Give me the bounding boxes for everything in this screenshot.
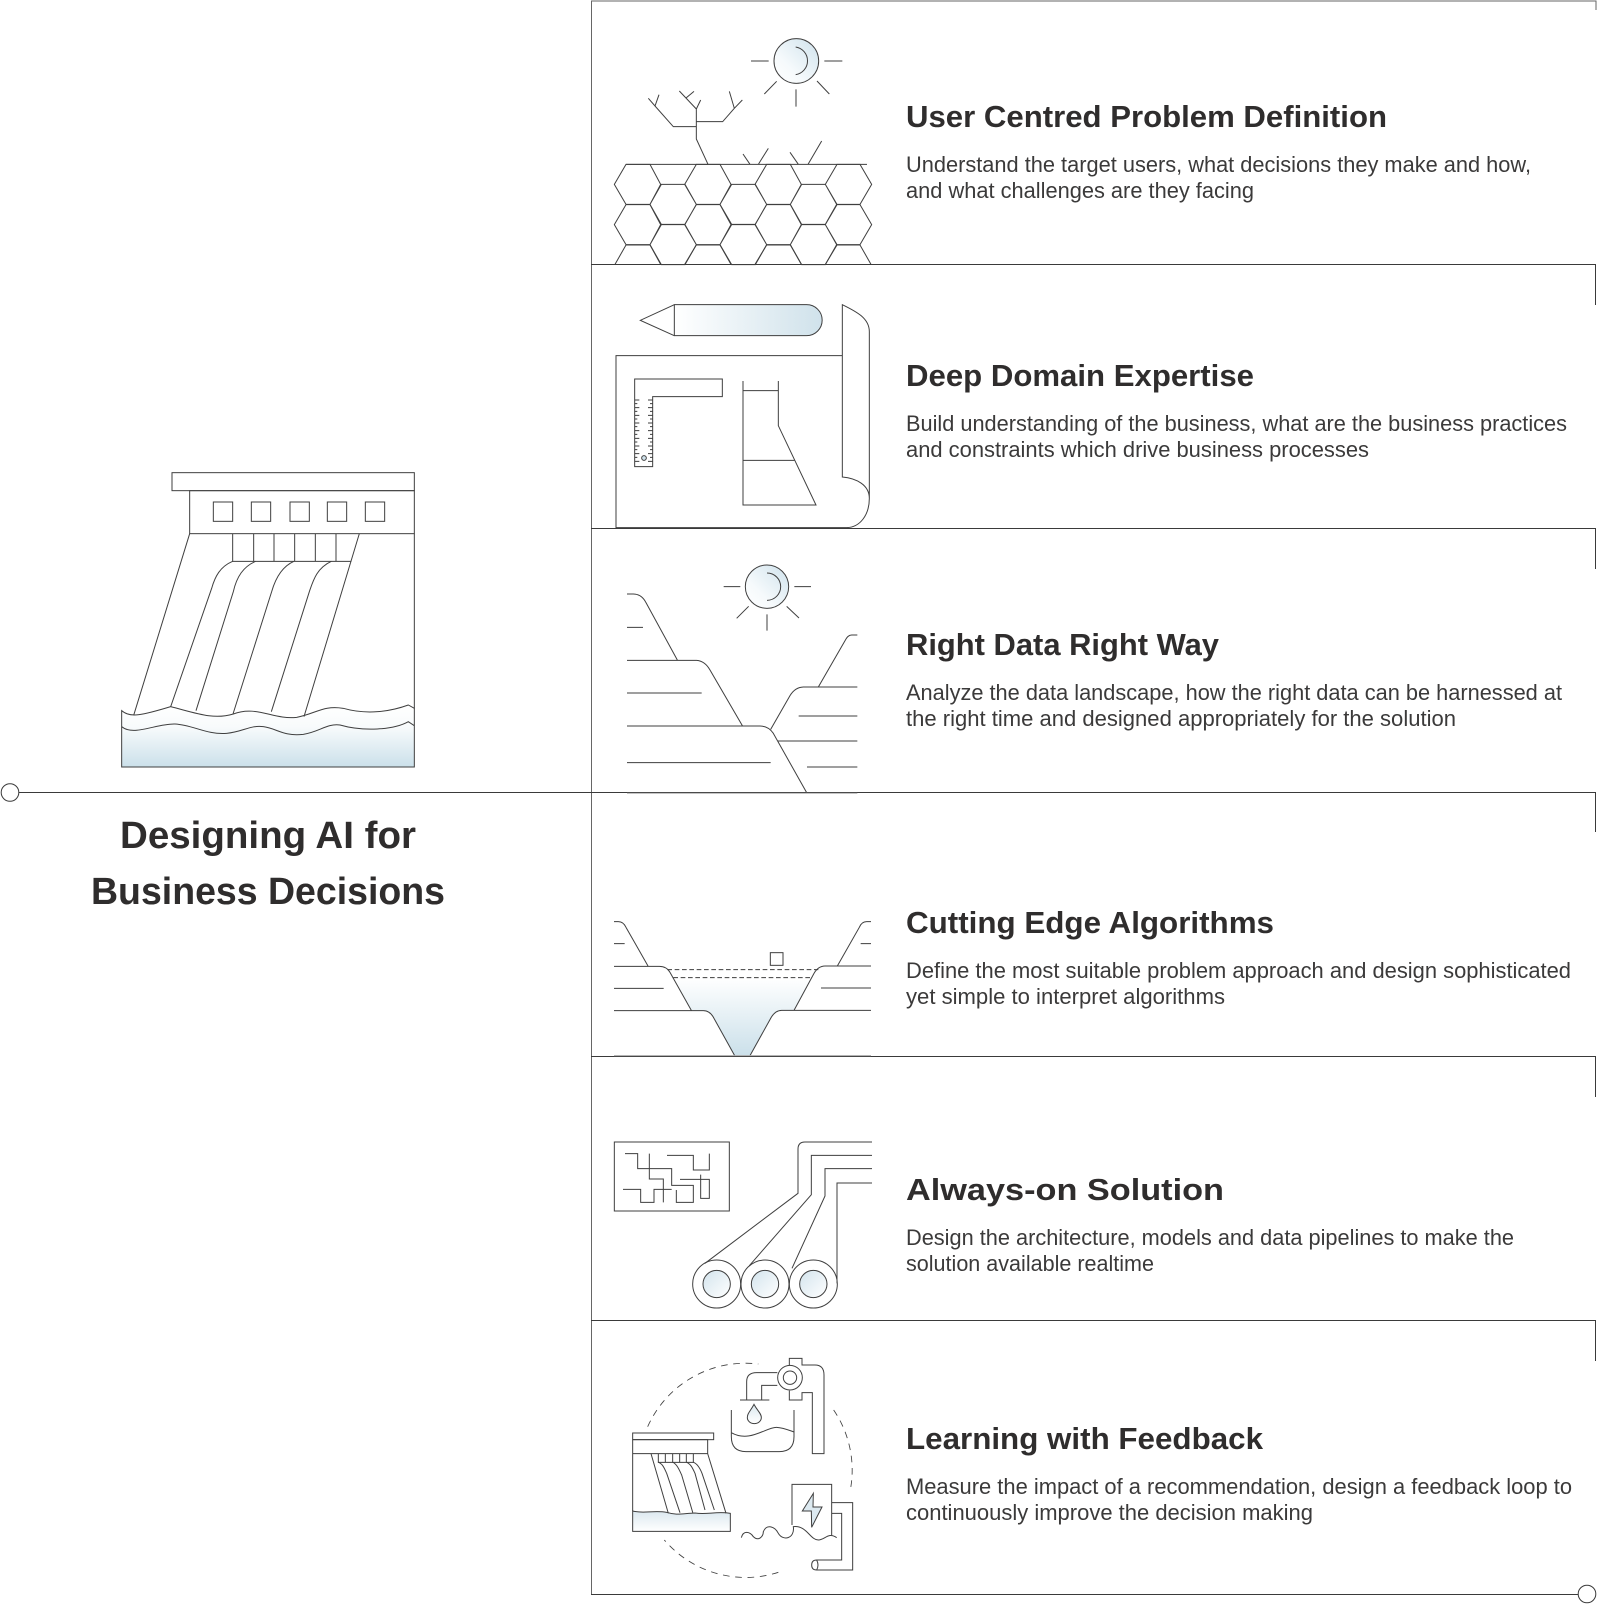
- icon: sun over terraced valley: [627, 565, 857, 793]
- text block: [906, 958, 1571, 1009]
- title: Business Decisions: [91, 871, 445, 913]
- heading: Always-on Solution: [906, 1172, 1224, 1207]
- text block: Design the architecture, models and data pipelines to make the: [906, 1225, 1514, 1250]
- heading: Cutting Edge Algorithms: [906, 905, 1274, 940]
- icon: dam, pump and power feedback cycle: [633, 1358, 853, 1577]
- icon: hydro dam: [122, 473, 414, 767]
- text block: [906, 1474, 1572, 1525]
- heading: Learning with Feedback: [906, 1421, 1264, 1456]
- text block: Build understanding of the business, what are the business practices: [906, 411, 1567, 436]
- panel: always-on solution: [614, 1142, 1514, 1308]
- heading: Deep Domain Expertise: [906, 358, 1254, 393]
- icon: filled reservoir cross section: [614, 922, 871, 1056]
- text block: yet simple to interpret algorithms: [906, 984, 1225, 1009]
- text block: [906, 152, 1531, 203]
- text block: solution available realtime: [906, 1251, 1154, 1276]
- title: [91, 815, 445, 913]
- text block: [906, 1225, 1514, 1276]
- title: Designing AI for: [120, 815, 416, 857]
- text block: continuously improve the decision making: [906, 1500, 1313, 1525]
- heading: Right Data Right Way: [906, 627, 1220, 662]
- panel: cutting edge algorithms: [614, 905, 1571, 1056]
- heading: User Centred Problem Definition: [906, 99, 1387, 134]
- text block: and what challenges are they facing: [906, 178, 1254, 203]
- text block: the right time and designed appropriately for the solution: [906, 706, 1456, 731]
- icon: sun, dry tree and cracked ground: [614, 39, 872, 265]
- panel: user centred problem definition: [614, 39, 1531, 265]
- text block: Define the most suitable problem approach and design sophisticated: [906, 958, 1571, 983]
- text block: Measure the impact of a recommendation, design a feedback loop to: [906, 1474, 1572, 1499]
- icon: circuit map and three pipelines: [614, 1142, 872, 1308]
- text block: [906, 680, 1562, 731]
- text block: Analyze the data landscape, how the right data can be harnessed at: [906, 680, 1562, 705]
- panel: learning with feedback: [633, 1358, 1572, 1577]
- icon: pencil and blueprint: [616, 305, 869, 528]
- panel: deep domain expertise: [616, 305, 1567, 528]
- panel: main title and dam: [91, 473, 445, 913]
- text block: Understand the target users, what decisions they make and how,: [906, 152, 1531, 177]
- panel: right data right way: [627, 565, 1562, 793]
- text block: [906, 411, 1567, 462]
- text block: and constraints which drive business processes: [906, 437, 1369, 462]
